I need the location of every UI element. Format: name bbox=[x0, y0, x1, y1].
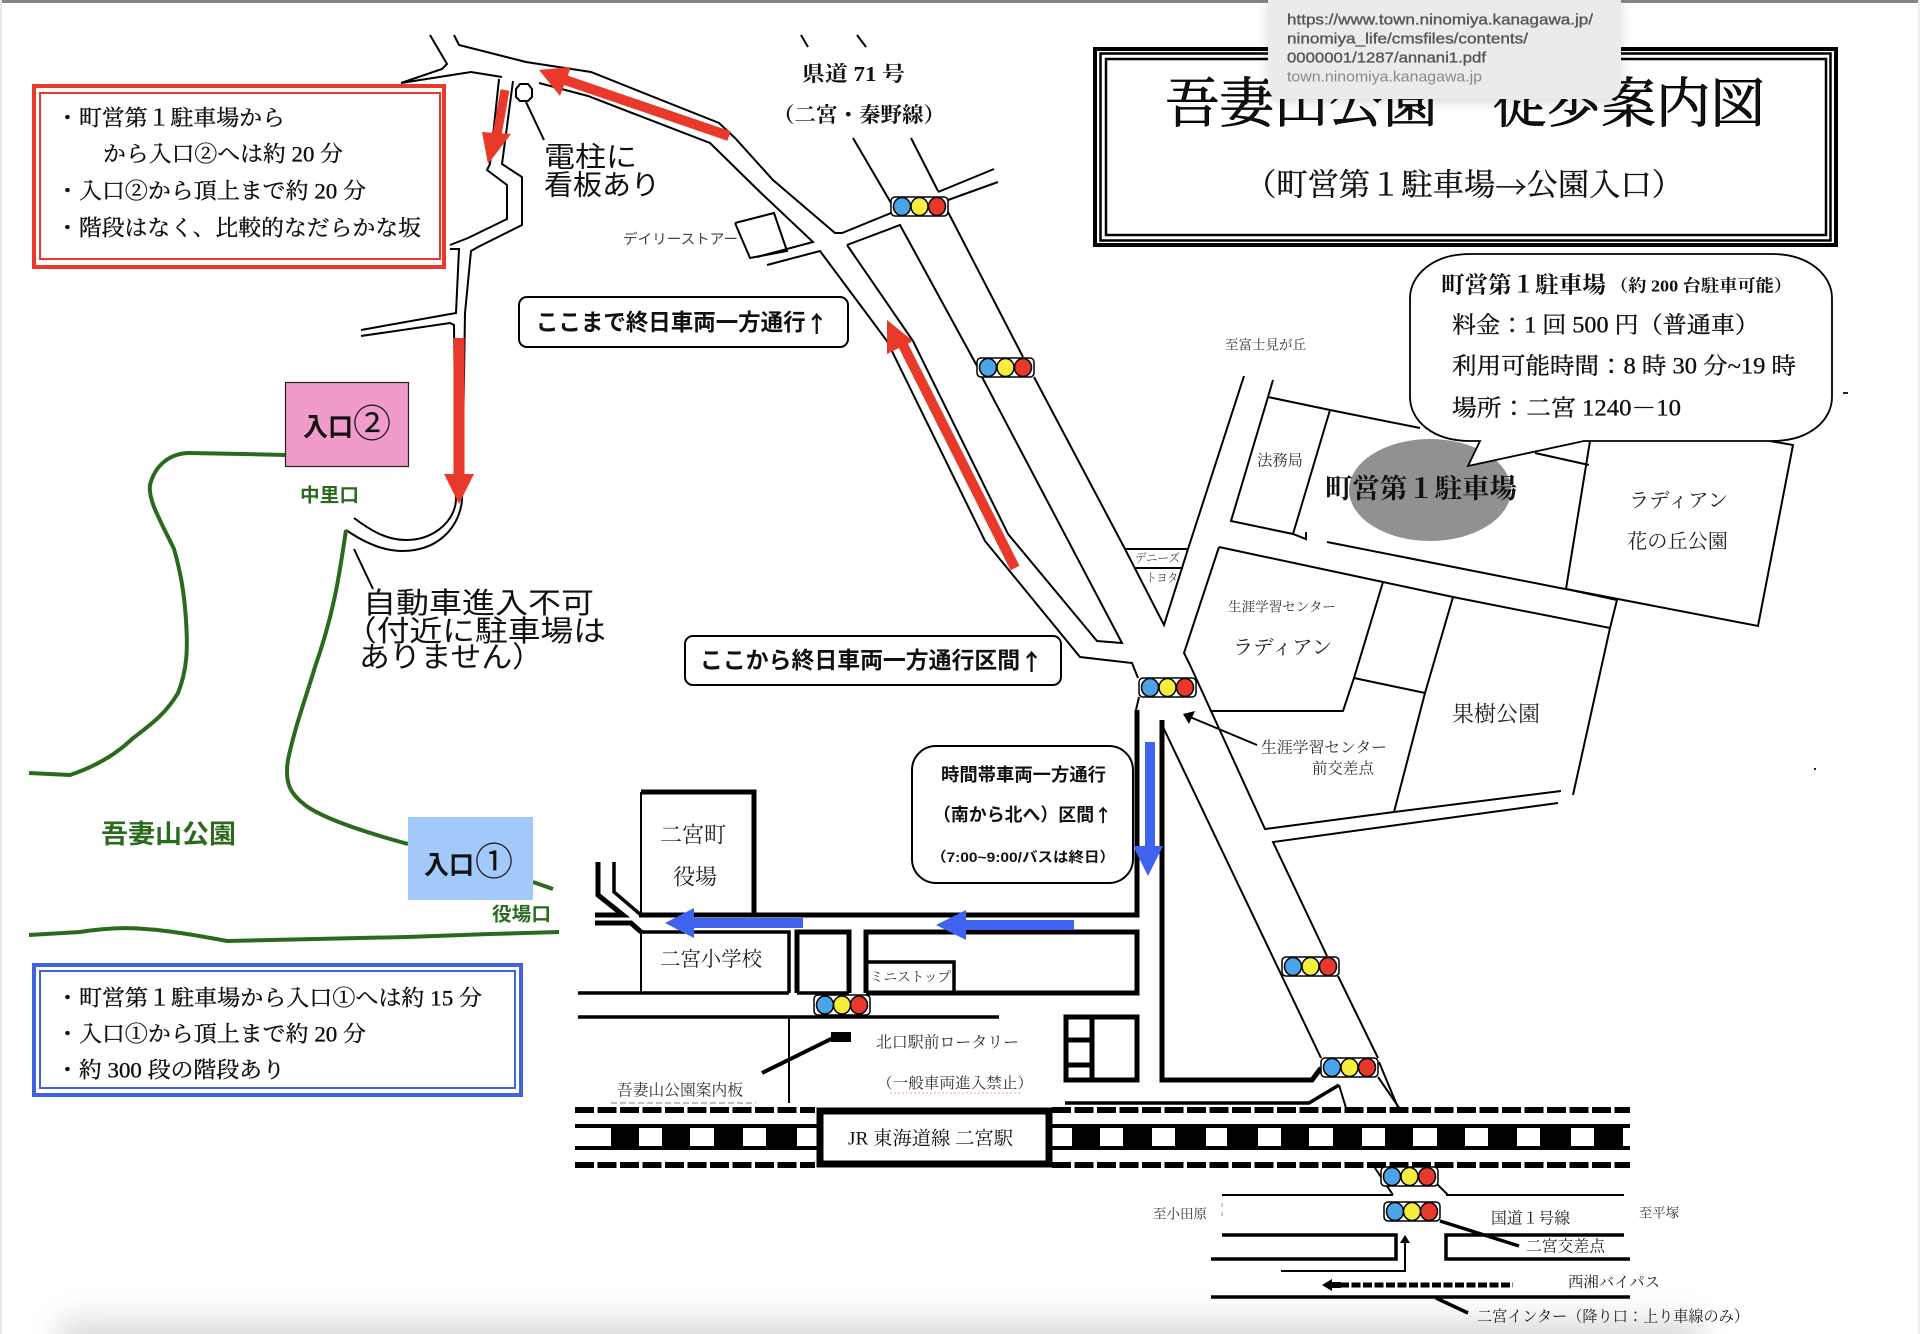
label: park guide board with leader: 吾妻山公園案内板 bbox=[617, 1082, 743, 1100]
arrow: red route top bbox=[539, 67, 729, 136]
arrow: red route descending bbox=[482, 90, 511, 164]
label: north rotary bbox=[876, 1034, 1033, 1092]
note: no car access: 自動車進入不可 bbox=[363, 587, 594, 620]
route 1 and bypass roads bbox=[1211, 1165, 1630, 1313]
traffic signal 3 bbox=[1139, 678, 1196, 697]
label: prefectural road 71: 県道 71 号 bbox=[802, 62, 905, 86]
label: fruit park: 果樹公園 bbox=[1452, 702, 1540, 726]
tooltip: source URL: ninomiya_life/cmsfiles/contents/ bbox=[1287, 30, 1529, 48]
note: no car access bbox=[344, 549, 606, 674]
label: Ninomiya crossing: 二宮交差点 bbox=[1526, 1236, 1606, 1256]
callout: parking info bubble bbox=[1410, 254, 1832, 466]
label: Yakuba entrance: 役場口 bbox=[492, 904, 551, 926]
callout: one way end bbox=[519, 297, 848, 347]
label: Nakazato entrance: 中里口 bbox=[300, 484, 359, 506]
callout: time-limited one way: （南から北へ）区間↑ bbox=[933, 802, 1112, 828]
traffic signal 1 bbox=[891, 197, 948, 216]
label: to Hiratsuka: 至平塚 bbox=[1639, 1204, 1679, 1220]
panel: route info to entrance 2 bbox=[34, 86, 444, 267]
label: route 1: 国道１号線 bbox=[1491, 1210, 1570, 1228]
traffic signal 5 bbox=[1282, 957, 1339, 976]
label: park guide board with leader bbox=[617, 1032, 851, 1100]
panel: route info to entrance 1 bbox=[34, 965, 521, 1095]
panel: title box bbox=[1095, 49, 1836, 245]
arrow: blue down bbox=[1133, 742, 1163, 876]
arrow: red route to entrance 2 bbox=[444, 338, 474, 504]
label: legal affairs bureau: 法務局 bbox=[1257, 452, 1303, 470]
tooltip: source URL: 0000001/1287/annani1.pdf bbox=[1287, 50, 1487, 66]
callout: time-limited one way bbox=[912, 746, 1133, 883]
label: town hall: 役場 bbox=[673, 864, 717, 890]
road network: upper and central streets bbox=[346, 35, 1793, 1109]
callout: parking info bubble: 場所：二宮 1240－10 bbox=[1452, 396, 1681, 420]
callout: parking info bubble: 町営第１駐車場 bbox=[1441, 272, 1606, 298]
label: elementary school: 二宮小学校 bbox=[660, 948, 762, 971]
entrance 1 box bbox=[408, 817, 533, 900]
label: Azumayama park: 吾妻山公園 bbox=[101, 819, 236, 849]
arrow: red route main road bbox=[887, 320, 1015, 568]
callout: parking info bubble: 利用可能時間：8 時 30 分~19 時 bbox=[1452, 354, 1796, 378]
label: learning center: 生涯学習センター bbox=[1228, 598, 1336, 614]
callout: parking info bubble: （約 200 台駐車可能） bbox=[1610, 276, 1792, 296]
callout: parking info bubble: 料金：1 回 500 円（普通車） bbox=[1452, 312, 1759, 338]
entrance 1 box: 入口 bbox=[424, 850, 474, 880]
panel: route info to entrance 1: ・約 300 段の階段あり bbox=[56, 1058, 285, 1082]
label: learning center crossing with arrow: 生涯学習センター bbox=[1261, 738, 1387, 756]
traffic signal 4 bbox=[814, 995, 870, 1015]
label: north rotary: 北口駅前ロータリー bbox=[876, 1034, 1019, 1052]
tooltip: source URL: https://www.town.ninomiya.kanagawa.jp/ bbox=[1287, 12, 1594, 28]
entrance 2 box bbox=[286, 382, 408, 466]
note: sign on pole: 看板あり bbox=[544, 170, 660, 200]
lower town blocks and streets bbox=[578, 792, 1399, 1110]
park boundary lines bbox=[29, 453, 559, 941]
panel: route info to entrance 2: ・入口②から頂上まで約 20 分 bbox=[56, 178, 366, 204]
label: parking lot: 町営第１駐車場 bbox=[1325, 474, 1517, 504]
callout: time-limited one way: 時間帯車両一方通行 bbox=[941, 764, 1106, 785]
note: sign on pole bbox=[544, 142, 660, 200]
note: sign on pole: 電柱に bbox=[544, 142, 637, 172]
title: 吾妻山公園 徒歩案内図 bbox=[1165, 74, 1765, 134]
label: Ninomiya interchange: 二宮インター（降り口：上り車線のみ） bbox=[1477, 1308, 1749, 1326]
label: Toyota: トヨタ bbox=[1146, 571, 1178, 585]
callout: time-limited one way: （7:00~9:00/バスは終日） bbox=[931, 849, 1115, 865]
panel: route info to entrance 1: ・町営第１駐車場から入口①へは約 15 分 bbox=[56, 986, 482, 1010]
traffic signal 6 bbox=[1321, 1058, 1378, 1077]
label: north rotary: （一般車両進入禁止） bbox=[877, 1074, 1033, 1092]
traffic signal 7 bbox=[1381, 1167, 1438, 1186]
panel: route info to entrance 2: ・町営第１駐車場から bbox=[56, 106, 285, 130]
label: prefectural road 71: （二宮・秦野線） bbox=[773, 103, 945, 127]
arrow: blue left 2 bbox=[936, 910, 1074, 940]
traffic signal 2 bbox=[977, 358, 1034, 377]
tooltip: source URL: town.ninomiya.kanagawa.jp bbox=[1287, 68, 1482, 86]
railway: JR Tokaido line bbox=[575, 1110, 1630, 1165]
label: to Odawara: 至小田原 bbox=[1153, 1206, 1207, 1222]
label: Radian flower park: ラディアン bbox=[1629, 489, 1728, 512]
icon: utility pole with leader bbox=[516, 84, 544, 140]
callout: one way start: ここから終日車両一方通行区間↑ bbox=[700, 643, 1043, 677]
note: no car access: （付近に駐車場は bbox=[344, 615, 606, 648]
label: JR station: JR 東海道線 二宮駅 bbox=[848, 1128, 1013, 1150]
panel: route info to entrance 2: ・階段はなく、比較的なだらかな坂 bbox=[56, 216, 421, 240]
traffic signal 8 bbox=[1384, 1202, 1440, 1221]
label: Radian: ラディアン bbox=[1233, 636, 1332, 659]
label: Denny's: デニーズ bbox=[1135, 551, 1180, 565]
label: town hall bbox=[660, 822, 726, 890]
entrance 2 box: ② bbox=[353, 404, 391, 446]
subtitle: （町営第１駐車場→公園入口） bbox=[1245, 162, 1683, 208]
label: Radian flower park: 花の丘公園 bbox=[1627, 530, 1728, 553]
label: to Fujimigaoka: 至富士見が丘 bbox=[1225, 338, 1306, 352]
panel: route info to entrance 2: から入口②へは約 20 分 bbox=[103, 142, 343, 166]
entrance 1 box: ① bbox=[475, 842, 513, 884]
callout: one way end: ここまで終日車両一方通行↑ bbox=[536, 305, 828, 339]
label: daily store: デイリーストアー bbox=[623, 231, 738, 247]
label: learning center crossing with arrow bbox=[1183, 711, 1387, 778]
panel: route info to entrance 1: ・入口①から頂上まで約 20 分 bbox=[56, 1022, 366, 1046]
note: no car access: ありません） bbox=[359, 642, 543, 674]
tooltip: source URL bbox=[1268, 0, 1621, 99]
label: Radian flower park bbox=[1627, 489, 1728, 553]
label: town hall: 二宮町 bbox=[660, 822, 726, 848]
arrow: blue left 1 bbox=[665, 908, 803, 938]
entrance 2 box: 入口 bbox=[303, 412, 353, 442]
label: prefectural road 71 bbox=[773, 62, 945, 127]
callout: one way start bbox=[685, 636, 1061, 685]
label: learning center crossing with arrow: 前交差点 bbox=[1312, 760, 1374, 778]
label: Seisho bypass: 西湘バイパス bbox=[1568, 1274, 1660, 1291]
label: Ministop: ミニストップ bbox=[870, 970, 951, 984]
panel: parking ellipse bbox=[1349, 439, 1511, 541]
